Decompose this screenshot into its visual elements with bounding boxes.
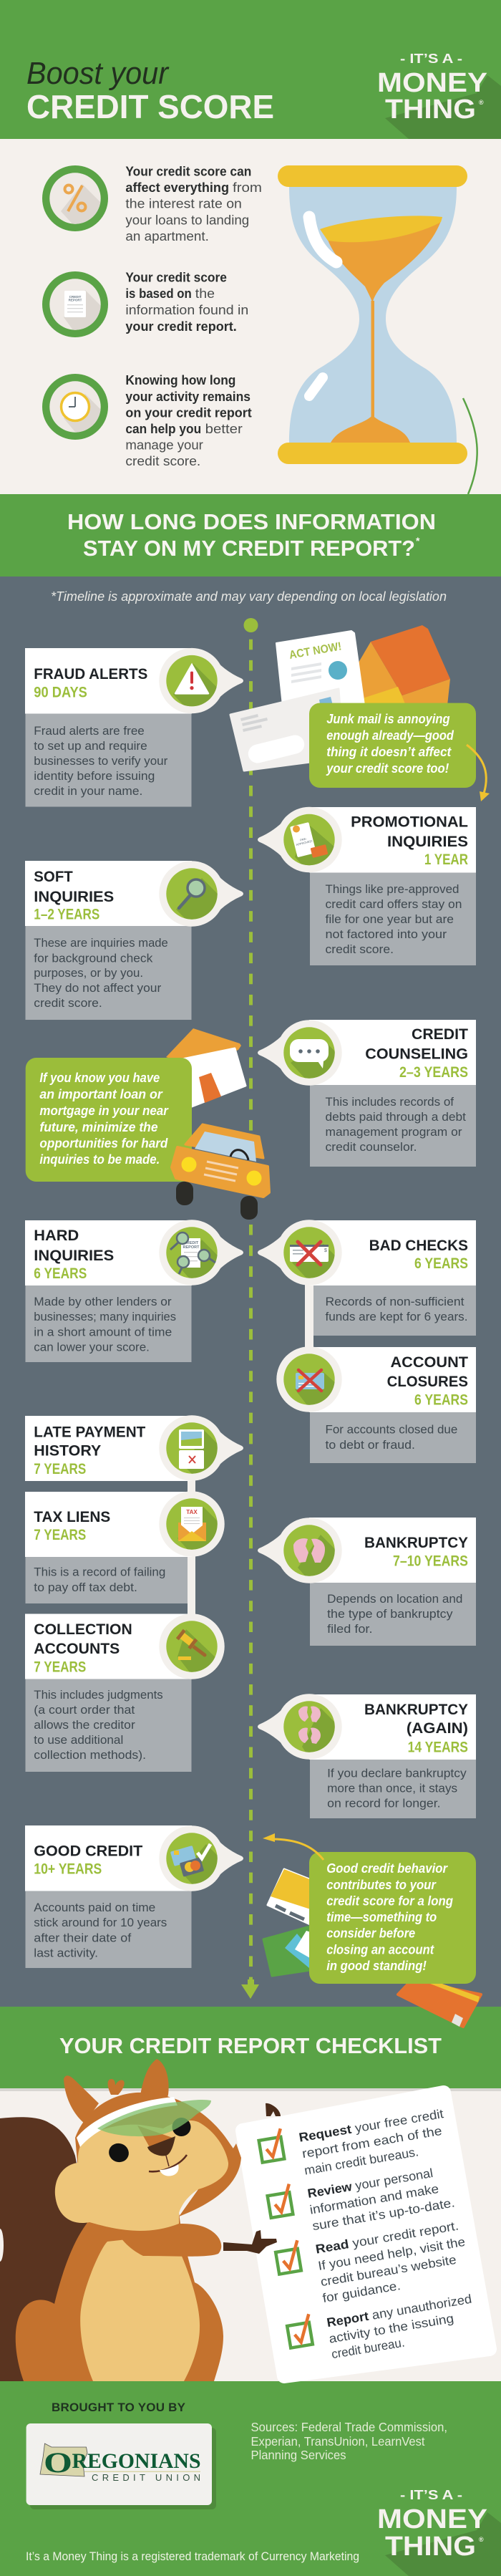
icon: two broken piggy banks [258,1694,342,1760]
checklist item: review: Review your personal [306,2166,434,2201]
panel: fraud alerts [25,648,243,806]
panel: hard inquiries: Made by other lenders or [34,1296,172,1308]
callout: good credit behavior: consider before [326,1926,415,1941]
panel: promotional inquiries: file for one year but are [325,913,454,926]
callout: good credit behavior: Good credit behavior [326,1861,448,1876]
sponsor logo card: O [44,2446,72,2479]
callout: loan advice [26,1058,192,1182]
text: knowing how long: better [205,422,243,436]
panel: fraud alerts: businesses to verify your [34,755,168,768]
arrow: junk mail to promotional inquiries [467,745,490,801]
illustration: junk mail [230,625,450,771]
icon: hourglass [278,165,467,464]
panel: account closures: ACCOUNT [391,1354,468,1371]
callout: good credit behavior: credit score for a long [326,1894,453,1908]
panel: soft inquiries: purposes, or by you. [34,967,143,980]
callout: good credit behavior: in good standing! [326,1959,427,1973]
footer logo: It's a Money Thing: THING [385,2532,476,2562]
text: credit score affects everything: the interest rate on [125,197,242,211]
illustration: credit cards [263,1869,481,2027]
callout: loan advice: If you know you have [39,1071,160,1085]
section heading: how long [0,494,501,577]
panel: tax liens [25,1491,225,1603]
icon: credit report document: CREDIT [69,295,82,299]
panel: credit counseling: management program or [325,1126,462,1139]
text: based on credit report: is based on [125,286,192,301]
panel: credit counseling: CREDIT [412,1026,468,1043]
section heading: checklist: YOUR CREDIT REPORT CHECKLIST [59,2033,442,2058]
callout: good credit behavior: closing an account [326,1942,434,1957]
timeline background [0,577,501,2007]
checklist item: read: If you need help, visit the [317,2234,466,2273]
title: CREDIT SCORE [26,88,274,125]
icon: report under magnifiers [159,1220,243,1285]
text: based on credit report: the [195,286,215,301]
panel: good credit [25,1825,243,1968]
panel: promotional inquiries: not factored into your [325,928,447,941]
section heading: how long: * [416,535,420,546]
panel: credit counseling: 2–3 YEARS [399,1064,468,1081]
header band [0,0,501,139]
panel: bad checks: Records of non-sufficient [325,1296,464,1308]
callout: loan advice: opportunities for hard [39,1136,168,1150]
panel: hard inquiries [25,1220,243,1362]
panel: soft inquiries [25,861,243,1020]
panel: collection accounts: collection methods). [34,1749,146,1762]
panel: collection accounts: This includes judgments [34,1689,163,1702]
text: knowing how long: can help you [125,422,201,436]
callout: junk mail: thing it doesn’t affect [326,745,452,759]
sponsor logo card [26,2423,216,2509]
callout: good credit behavior: contributes to your [326,1878,437,1892]
checklist item: request: main credit bureaus. [303,2144,419,2178]
panel: good credit: stick around for 10 years [34,1916,167,1929]
panel: account closures: CLOSURES [387,1374,468,1390]
callout: loan advice: future, minimize the [39,1120,158,1134]
panel: credit counseling: This includes records of [325,1096,454,1109]
arrow: good credit callout to timeline [263,1833,324,1860]
panel: good credit: Accounts paid on time [34,1901,155,1914]
panel: hard inquiries: businesses; many inquiries [34,1311,176,1323]
illustration: squirrel mascot [0,2059,281,2381]
icon: report under magnifiers: REPORT [183,1245,200,1250]
panel: soft inquiries: These are inquiries made [34,937,168,950]
section heading: how long: HOW LONG DOES INFORMATION [67,509,436,534]
sources: Planning Services [250,2448,346,2462]
timeline dashed line with arrow [241,618,259,1999]
icon: crossed card [276,1346,342,1412]
callout: good credit behavior: time—something to [326,1910,437,1924]
panel: soft inquiries: 1–2 YEARS [34,907,99,923]
illustration: car [172,1124,269,1220]
panel: fraud alerts: identity before issuing [34,770,155,783]
panel: bad checks: BAD CHECKS [369,1238,468,1254]
panel: account closures: For accounts closed due [325,1424,457,1437]
panel: collection accounts: ACCOUNTS [34,1641,120,1657]
footer logo: It's a Money Thing: - IT’S A - [400,2488,462,2502]
icon: percent [42,165,108,231]
text: based on credit report: information found in [125,303,248,317]
callout: junk mail: enough already—good [326,728,454,743]
text: credit score affects everything [125,165,262,243]
panel: account closures [276,1346,476,1463]
panel: fraud alerts: to set up and require [34,740,147,753]
panel: bankruptcy again: (AGAIN) [407,1720,468,1737]
callout: loan advice: an important loan or [39,1087,163,1101]
callout: loan advice: mortgage in your near [39,1104,169,1118]
panel: bankruptcy: the type of bankruptcy [327,1608,453,1621]
panel: bankruptcy again: If you declare bankruptcy [327,1767,467,1780]
footer band [0,2381,501,2576]
icon: broken piggy bank [258,1518,342,1583]
checklist item: request: report from each of the [301,2123,443,2161]
text: knowing how long: credit score. [125,454,200,468]
callout: good credit behavior [309,1852,476,1984]
callout: loan advice: inquiries to be made. [39,1152,160,1167]
illustration: junk mail: ACT NOW! [288,640,343,662]
callout: junk mail: Junk mail is annoying [326,712,450,726]
panel: fraud alerts: Fraud alerts are free [34,725,145,738]
checklist item: read: for guidance. [321,2278,402,2305]
panel: fraud alerts: credit in your name. [34,785,142,798]
panel: promotional inquiries: Things like pre-approved [325,883,459,896]
panel: credit counseling: credit counselor. [325,1141,417,1154]
panel: good credit: 10+ YEARS [34,1861,102,1878]
panel: tax liens: This is a record of failing [34,1566,165,1579]
checklist item: read: Read your credit report. [314,2219,459,2257]
icon: crossed check [258,1220,342,1285]
text: based on credit report: your credit report. [125,319,237,334]
icon: clock [42,374,108,440]
panel: bankruptcy again: more than once, it stays [327,1782,457,1795]
footer logo: It's a Money Thing [377,2488,501,2576]
panel: good credit: GOOD CREDIT [34,1843,142,1860]
sources: Sources: Federal Trade Commission, [250,2420,447,2434]
icon: report under magnifiers: CREDIT [184,1241,199,1245]
panel: promotional inquiries [258,807,476,965]
icon: warning [159,648,243,713]
connector: late payment, tax liens and collection accounts [188,1475,195,1619]
panel: hard inquiries: can lower your score. [34,1341,150,1354]
title [26,56,274,125]
panel: late payment history: LATE PAYMENT [34,1424,145,1441]
checklist card [243,2093,490,2376]
panel: bankruptcy: BANKRUPTCY [364,1535,468,1551]
text: credit score affects everything: affect everything [125,180,229,195]
panel: soft inquiries: credit score. [34,997,102,1010]
checklist item: report: activity to the issuing [328,2311,454,2346]
panel: soft inquiries: SOFT [34,869,73,885]
panel: tax liens: to pay off tax debt. [34,1581,137,1594]
panel: collection accounts: 7 YEARS [34,1659,86,1676]
panel: collection accounts: COLLECTION [34,1621,132,1638]
text: based on credit report: Your credit score [125,270,227,284]
icon: credit report document: REPORT [69,298,82,302]
sources [250,2420,447,2462]
icon: crossed check: $ [324,1248,327,1253]
footer logo: It's a Money Thing: ® [479,2536,484,2543]
text: knowing how long [125,373,252,468]
checklist panel background [0,2088,501,2381]
panel: bankruptcy [258,1518,476,1646]
panel: bankruptcy: 7–10 YEARS [393,1553,468,1570]
text: knowing how long: on your credit report [125,406,252,420]
panel: fraud alerts: 90 DAYS [34,685,87,700]
icon: gavel [159,1613,225,1679]
callout: junk mail [309,703,476,788]
panel: collection accounts: to use additional [34,1734,123,1747]
checklist item: read: credit bureau’s website [319,2252,457,2289]
logo: It's a Money Thing: ® [479,99,484,106]
section heading: checklist [0,2007,501,2088]
checklist item: review [266,2166,456,2233]
panel: fraud alerts: FRAUD ALERTS [34,666,147,682]
panel: soft inquiries: INQUIRIES [34,889,114,905]
panel: account closures: to debt or fraud. [325,1439,415,1452]
logo: It's a Money Thing: - IT’S A - [400,52,462,66]
sponsor logo card: CREDIT UNION [92,2472,200,2483]
panel: promotional inquiries: PROMOTIONAL [351,814,468,831]
panel: promotional inquiries: credit score. [325,943,394,956]
panel: hard inquiries: in a short amount of time [34,1326,172,1339]
panel: bad checks: 6 YEARS [414,1255,468,1272]
checklist item: review: information and make [308,2181,439,2217]
panel: bad checks [258,1220,476,1336]
icon: pre-approved offer [258,807,342,872]
logo: It's a Money Thing: MONEY [377,68,487,98]
icon: pre-approved offer: PRE- [300,836,308,842]
panel: good credit: after their date of [34,1932,132,1945]
checklist item: read [274,2219,466,2305]
panel: promotional inquiries: credit card offers stay on [325,898,462,911]
panel: promotional inquiries: INQUIRIES [387,834,468,850]
panel: late payment history: 7 YEARS [34,1461,86,1477]
panel: bankruptcy again: 14 YEARS [408,1740,468,1756]
panel: tax liens: TAX LIENS [34,1509,110,1525]
footer logo: It's a Money Thing: MONEY [377,2504,487,2534]
text: knowing how long: manage your [125,438,203,453]
panel: soft inquiries: They do not affect your [34,982,162,995]
panel: bad checks: funds are kept for 6 years. [325,1311,468,1323]
panel: credit counseling: debts paid through a debt [325,1111,466,1124]
panel: account closures: 6 YEARS [414,1392,468,1408]
icon: tax envelope [159,1491,225,1557]
text: credit score affects everything: an apartment. [125,229,209,243]
connector: bad checks to account closures [305,1282,313,1350]
checklist item: review: sure that it’s up-to-date. [311,2195,456,2233]
sponsor logo card: REGONIANS [72,2449,200,2473]
icon: speech bubble [258,1020,342,1086]
panel: bankruptcy again [258,1694,476,1818]
panel: bankruptcy again: on record for longer. [327,1798,441,1810]
text: credit score affects everything: from [233,180,262,195]
panel: soft inquiries: for background check [34,952,153,965]
panel: hard inquiries: HARD [34,1227,79,1244]
text: based on credit report [125,270,248,334]
panel: bankruptcy: Depends on location and [327,1593,462,1606]
panel: bankruptcy: filed for. [327,1623,372,1636]
panel: late payment history [25,1415,243,1481]
panel: collection accounts: allows the creditor [34,1719,135,1732]
icon: pre-approved offer: APPROVED! [296,839,313,846]
logo: It's a Money Thing: THING [385,95,476,125]
checklist item: report [286,2292,472,2361]
trademark note: It’s a Money Thing is a registered trademark of Currency Marketing [26,2550,359,2563]
section heading: how long: STAY ON MY CREDIT REPORT? [83,536,415,561]
panel: collection accounts [25,1613,225,1772]
intro panel [42,165,478,494]
panel: bankruptcy again: BANKRUPTCY [364,1702,468,1718]
checklist item: report: Report any unauthorized [326,2292,472,2330]
timeline note: *Timeline is approximate and may vary depending on local legislation [51,589,447,604]
panel: hard inquiries: INQUIRIES [34,1248,114,1264]
icon: credit report document [42,271,108,337]
text: credit score affects everything: Your credit score can [125,165,251,179]
checklist item: request [258,2106,444,2178]
text: knowing how long: your activity remains [125,390,250,404]
panel: credit counseling: COUNSELING [365,1046,468,1063]
icon: flip phone statement [159,1415,243,1481]
panel: tax liens: 7 YEARS [34,1527,86,1543]
illustration: house [166,1028,245,1106]
icon: magnifier [159,861,243,927]
callout: junk mail: your credit score too! [326,761,449,776]
checklist item: report: credit bureau. [331,2335,406,2361]
text: credit score affects everything: your loans to landing [125,213,249,227]
checklist item: request: Request your free credit [298,2106,444,2145]
panel: collection accounts: (a court order that [34,1704,135,1717]
logo: It's a Money Thing [377,52,501,139]
icon: tax envelope: TAX [186,1509,198,1515]
panel: promotional inquiries: 1 YEAR [424,852,468,868]
sponsor heading: BROUGHT TO YOU BY [52,2401,186,2414]
panel: late payment history: HISTORY [34,1443,101,1460]
panel: credit counseling [258,1020,476,1167]
text: knowing how long: Knowing how long [125,373,235,387]
icon: cards with check [159,1825,243,1891]
sources: Experian, TransUnion, LearnVest [250,2434,425,2449]
panel: good credit: last activity. [34,1947,98,1959]
panel: hard inquiries: 6 YEARS [34,1265,87,1282]
title: Boost your [26,56,170,91]
